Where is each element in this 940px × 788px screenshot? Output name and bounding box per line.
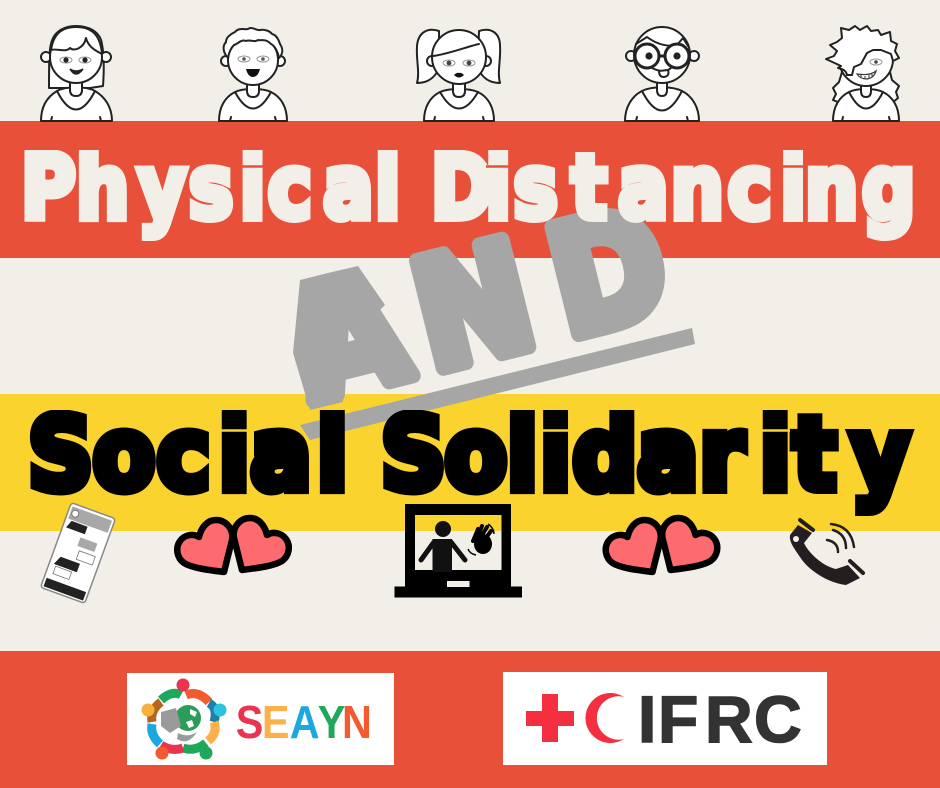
band: bottom red [0,651,940,788]
band: top red [0,121,940,258]
icon: pair of hearts left [177,518,289,572]
logo: SEAYN [127,673,394,765]
icon: laptop with waving person [394,504,522,598]
icon: smartphone with chat bubbles [41,503,115,603]
logo: IFRC [503,672,827,765]
icon: telephone handset with sound waves [790,520,863,585]
logo emblem: ring of people around globe [142,678,226,760]
person: kid with spiky hair [826,26,899,121]
icon: red crescent [585,693,624,743]
heading: Physical Distancing: Physical Distancing [21,137,915,240]
person: boy with round glasses [625,27,699,121]
band: yellow [0,394,940,531]
person: girl with bob hair [41,26,112,121]
word: AND with underline: AND [278,174,684,435]
person: boy with curly hair [219,28,287,121]
heading: Social Solidarity: Social Solidarity [28,395,910,513]
icon: pair of hearts right [606,518,717,572]
logo wordmark: SEAYN: SEAYN [236,697,372,749]
icon: red cross [526,694,574,742]
person: girl with pigtails [417,30,500,121]
logo wordmark: IFRC: IFRC [638,682,802,756]
